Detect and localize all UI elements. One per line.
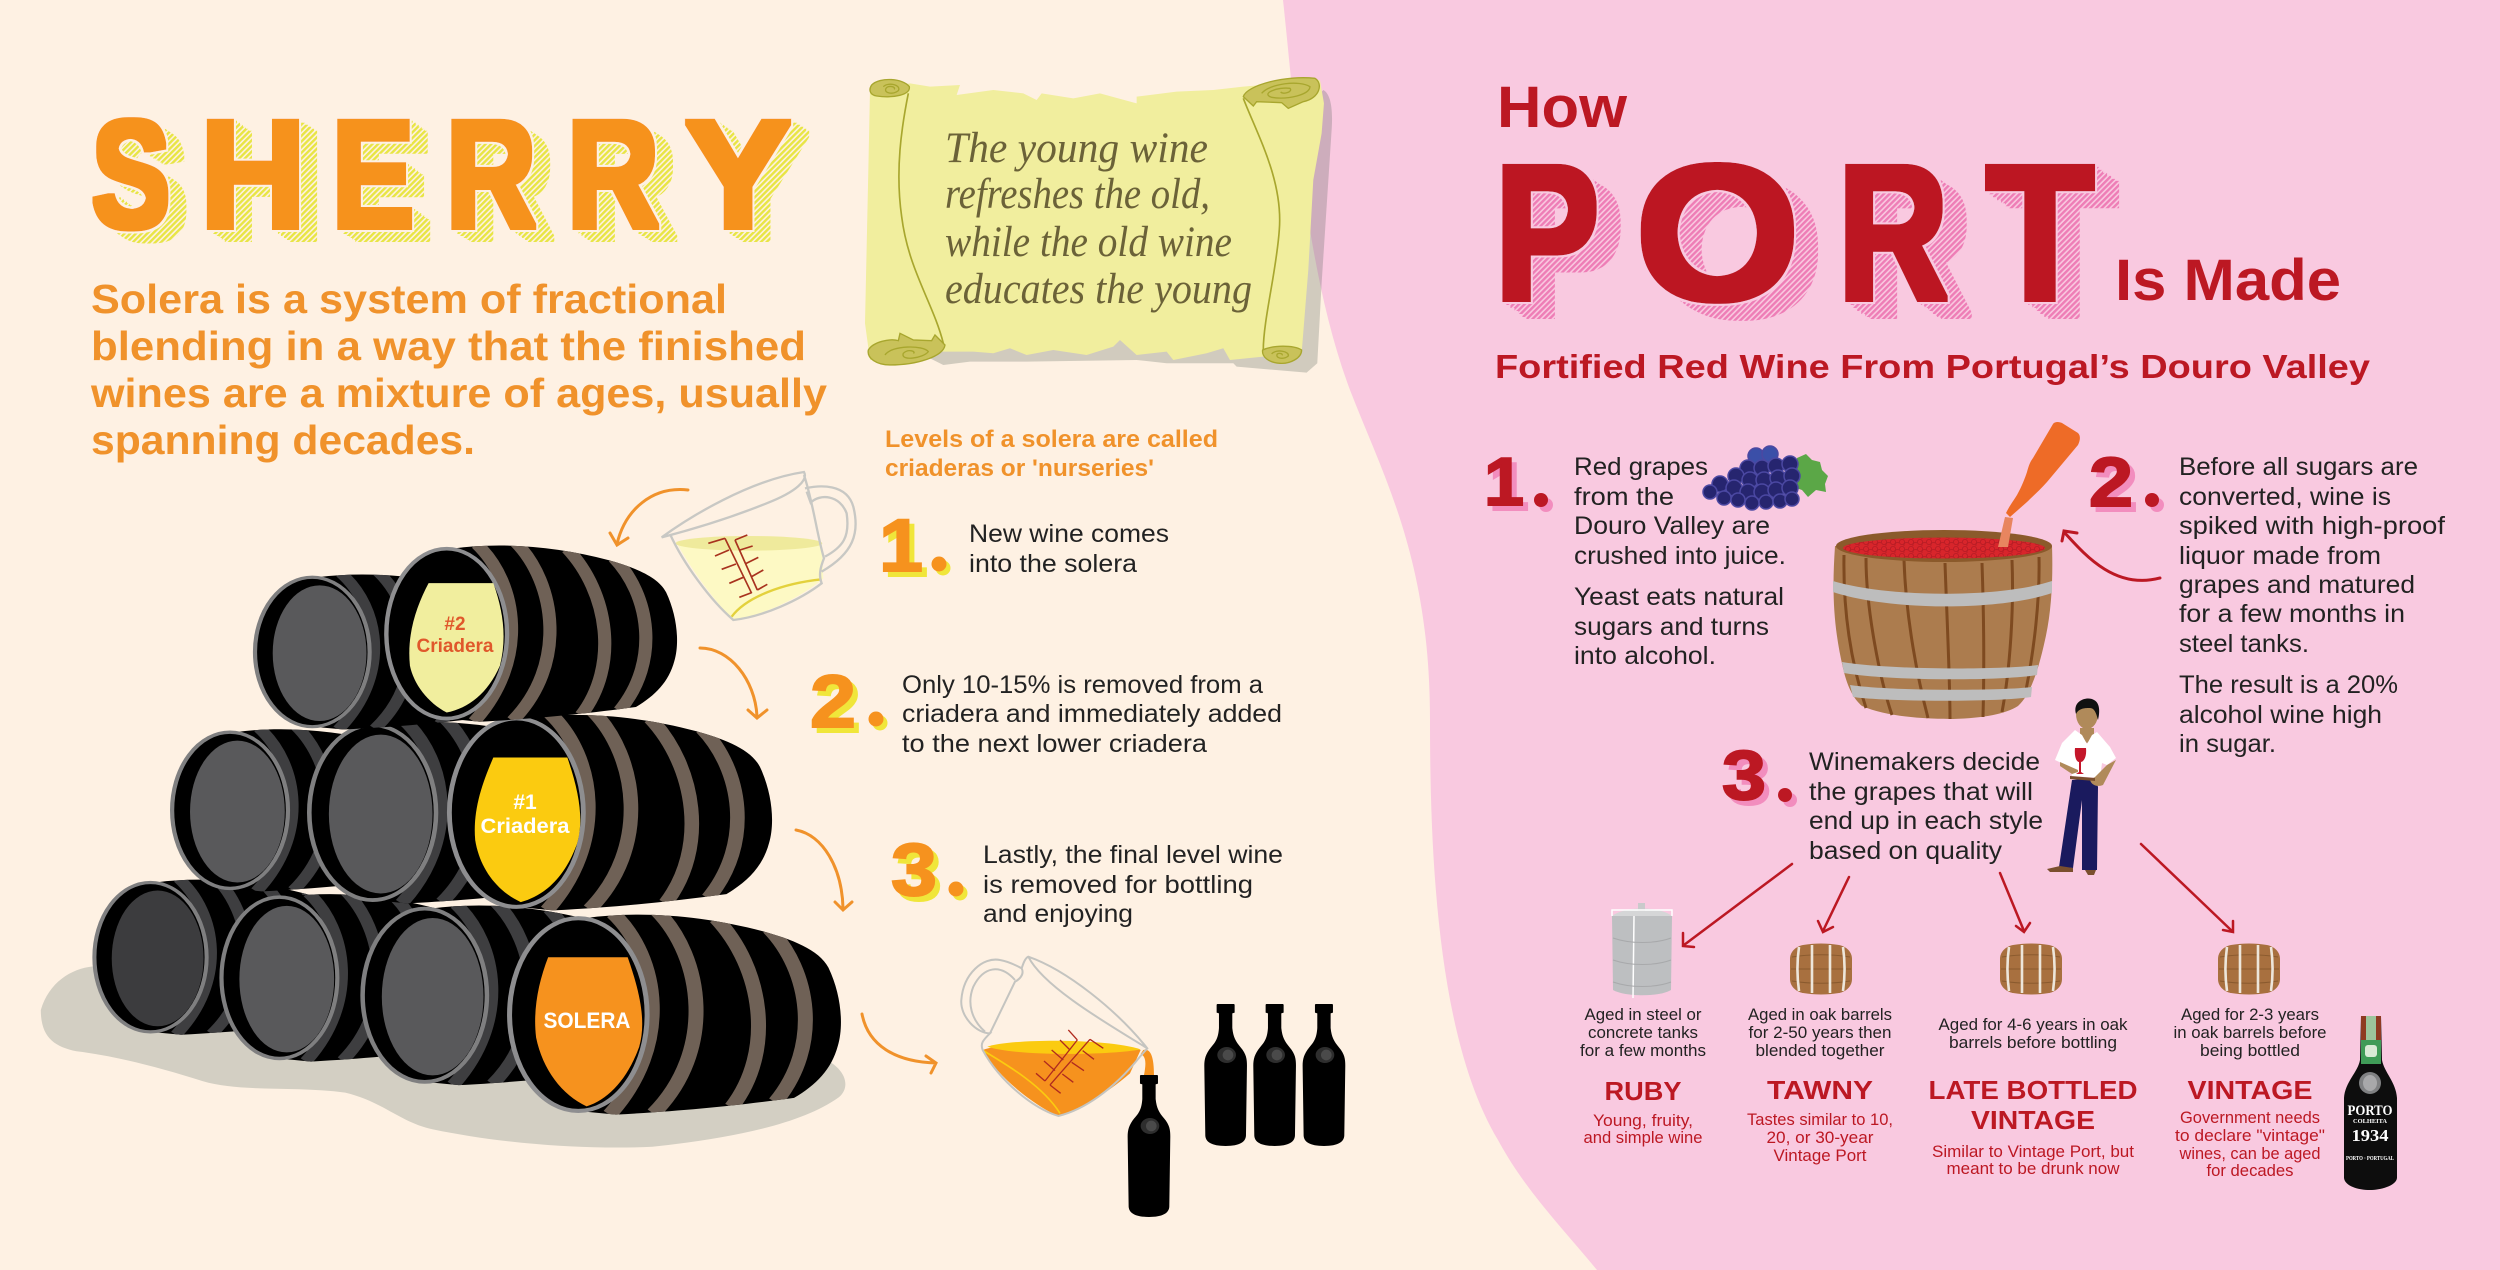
text: step 2 port — [2179, 453, 2445, 758]
arrow: spirit into vat — [2062, 531, 2160, 580]
quote text: refreshes the old, — [945, 171, 1210, 218]
barrel label: #1 criadera — [480, 791, 570, 838]
arrows: port styles — [1683, 844, 2233, 947]
column: vintage: wines, can be aged — [2179, 1145, 2320, 1163]
icon: oak barrel late bottled — [2000, 944, 2062, 994]
column: tawny: Tastes similar to 10, — [1747, 1111, 1893, 1129]
icon: oak barrel tawny — [1790, 944, 1852, 994]
text: step 1 port: into alcohol. — [1574, 642, 1716, 670]
title: SHERRY: S — [92, 89, 170, 260]
word: PORT — [1495, 125, 2094, 340]
text block: solera definition: Solera is a system of fractional — [91, 276, 727, 322]
barrel: top back — [255, 571, 531, 730]
icon: porto bottle 1934: PORTO — [2348, 1103, 2392, 1119]
title: SHERRY: R — [567, 89, 659, 260]
barrel: middle centre — [309, 718, 615, 903]
barrel stack — [41, 542, 845, 1148]
number 3 port — [1722, 736, 1797, 819]
text: step 2 port: converted, wine is — [2179, 483, 2391, 511]
text: step 2 port: steel tanks. — [2179, 630, 2309, 658]
text block: solera definition: wines are a mixture of ages, usually — [90, 370, 827, 416]
text: step 2 port: grapes and matured — [2179, 571, 2415, 599]
text: step 2 sherry: criadera and immediately added — [902, 700, 1282, 728]
text: step 1 port — [1574, 453, 1786, 670]
text: step 2 port: in sugar. — [2179, 730, 2276, 758]
column: vintage: being bottled — [2200, 1042, 2300, 1060]
column: late bottled vintage: LATE BOTTLED — [1928, 1075, 2138, 1105]
text: step 1 port: sugars and turns — [1574, 613, 1769, 641]
text: step 1 port: from the — [1574, 483, 1674, 511]
text: step 1 sherry: into the solera — [969, 550, 1137, 578]
column: ruby: RUBY — [1604, 1076, 1682, 1106]
column: ruby: Aged in steel or — [1584, 1006, 1702, 1024]
barrel label: #2 criadera: #2 — [444, 614, 466, 635]
icon: porto bottle 1934 — [2344, 1016, 2397, 1190]
number 3 port: 3 — [1727, 741, 1771, 819]
barrel: middle left — [172, 726, 451, 891]
number 2 port: 2 — [2089, 443, 2133, 521]
word: PORT: O — [1635, 125, 1800, 340]
title: SHERRY: H — [200, 89, 306, 260]
column: ruby — [1580, 1006, 1706, 1147]
text: step 3 port: end up in each style — [1809, 807, 2043, 835]
column: late bottled vintage: meant to be drunk now — [1946, 1160, 2120, 1178]
barrel: solera — [510, 910, 841, 1115]
text: step 2 port: spiked with high-proof — [2179, 512, 2445, 540]
number 2 port — [2089, 443, 2164, 526]
number 1 sherry: 1 — [879, 504, 923, 587]
text: step 1 port: Yeast eats natural — [1574, 583, 1784, 611]
text: step 3 port: based on quality — [1809, 837, 2003, 865]
text: step 3 port: the grapes that will — [1809, 778, 2033, 806]
text: step 1 port: Red grapes — [1574, 453, 1708, 481]
number 2 sherry: 2 — [815, 665, 861, 748]
column: vintage: for decades — [2206, 1162, 2294, 1180]
number 2 sherry: 2 — [810, 660, 856, 743]
column: vintage: Aged for 2-3 years — [2181, 1006, 2319, 1024]
text block: solera definition — [90, 276, 827, 463]
column: tawny: Vintage Port — [1774, 1147, 1867, 1165]
text: step 1 port: crushed into juice. — [1574, 542, 1786, 570]
text: step 3 sherry — [983, 841, 1283, 928]
text: step 2 port: The result is a 20% — [2179, 671, 2398, 699]
arrows: sherry flow — [610, 490, 936, 1073]
quote text: while the old wine — [945, 219, 1232, 266]
number 2 port: 2 — [2094, 448, 2138, 526]
column: late bottled vintage: VINTAGE — [1971, 1105, 2095, 1135]
icon: oak barrel vintage — [2218, 944, 2280, 994]
text block: solera definition: spanning decades. — [91, 417, 475, 463]
column: ruby: and simple wine — [1584, 1129, 1702, 1147]
title: How PORT Is Made — [1501, 86, 2339, 321]
icon: porto bottle 1934: COLHEITA — [2353, 1119, 2388, 1125]
text: step 1 sherry — [969, 520, 1169, 578]
title: SHERRY: R — [446, 89, 536, 260]
word: How: How — [1497, 75, 1628, 140]
column: vintage: Government needs — [2180, 1109, 2320, 1127]
number 1 port — [1484, 444, 1553, 525]
barrel: bottom centre — [221, 891, 501, 1062]
barrel label: #2 criadera: Criadera — [416, 636, 494, 657]
number 3 port: 3 — [1722, 736, 1766, 814]
quote text: The young wine — [945, 125, 1208, 172]
scroll with quote — [865, 78, 1332, 373]
heading: levels of a solera: criaderas or 'nurseries' — [885, 455, 1154, 482]
quote text — [945, 125, 1252, 313]
panel: port background — [1283, 0, 2500, 1270]
column: tawny: blended together — [1756, 1042, 1885, 1060]
quote text: educates the young — [945, 266, 1252, 313]
barrel label: #2 criadera — [416, 614, 494, 657]
barrel: bottom right grey — [363, 902, 662, 1085]
icon: grapes — [1703, 446, 1828, 510]
barrel: criadera 1 — [449, 711, 772, 910]
column: vintage: to declare "vintage" — [2175, 1127, 2325, 1145]
column: late bottled vintage: Aged for 4-6 years in oak — [1938, 1016, 2128, 1034]
text: step 1 sherry: New wine comes — [969, 520, 1169, 548]
ground shadow — [41, 966, 845, 1148]
column: vintage — [2174, 1006, 2326, 1180]
barrel label: #1 criadera: #1 — [513, 791, 537, 814]
icon: porto bottle 1934: PORTO · PORTUGAL — [2346, 1156, 2394, 1162]
column: tawny — [1747, 1006, 1893, 1165]
barrel label: solera: SOLERA — [544, 1008, 631, 1033]
text: step 2 sherry: Only 10-15% is removed from a — [902, 671, 1263, 699]
number 3 sherry — [891, 828, 968, 916]
icon: pouring jug and bottles — [961, 957, 1345, 1217]
column: tawny: Aged in oak barrels — [1748, 1006, 1892, 1024]
word: Is Made: Is Made — [2115, 248, 2341, 313]
icon: winemaker — [2047, 699, 2116, 875]
text block: solera definition: blending in a way that the finished — [91, 323, 806, 369]
column: late bottled vintage: Similar to Vintage Port, but — [1932, 1143, 2134, 1161]
column: tawny: for 2-50 years then — [1748, 1024, 1892, 1042]
number 1 port: 1 — [1489, 449, 1529, 525]
column: tawny: 20, or 30-year — [1766, 1129, 1874, 1147]
text: step 3 sherry: Lastly, the final level wine — [983, 841, 1283, 869]
text: step 3 sherry: and enjoying — [983, 900, 1133, 928]
text: step 3 port — [1809, 748, 2043, 865]
column: ruby: concrete tanks — [1588, 1024, 1698, 1042]
text: step 2 port: liquor made from — [2179, 542, 2381, 570]
barrel label: #1 criadera: Criadera — [480, 815, 570, 838]
number 1 port: 1 — [1484, 444, 1524, 520]
title: SHERRY: Y — [685, 89, 791, 260]
barrel: bottom left — [94, 876, 365, 1035]
column: late bottled vintage — [1928, 1016, 2138, 1178]
icon: orange bottle pouring — [1998, 422, 2080, 547]
word: PORT: P — [1495, 125, 1599, 340]
text: step 2 sherry: to the next lower criadera — [902, 730, 1207, 758]
column: vintage: VINTAGE — [2188, 1075, 2312, 1105]
number 3 sherry: 3 — [891, 828, 937, 911]
text: step 2 port: Before all sugars are — [2179, 453, 2418, 481]
icon: wooden vat — [1833, 530, 2052, 719]
number 1 sherry — [879, 504, 950, 592]
subtitle: Fortified Red Wine From Portugal’s Douro Valley — [1495, 348, 2371, 385]
icon: porto bottle 1934: 1934 — [2352, 1126, 2389, 1145]
column: tawny: TAWNY — [1767, 1075, 1873, 1105]
icon: measuring jug new wine — [662, 472, 856, 620]
text: step 2 port: for a few months in — [2179, 600, 2405, 628]
text: step 2 sherry — [902, 671, 1282, 758]
column: ruby: Young, fruity, — [1593, 1112, 1693, 1130]
title: SHERRY — [92, 117, 810, 244]
column: vintage: in oak barrels before — [2174, 1024, 2326, 1042]
barrel: criadera 2 — [386, 542, 677, 722]
text: step 3 sherry: is removed for bottling — [983, 871, 1253, 899]
text: step 2 port: alcohol wine high — [2179, 701, 2382, 729]
text: step 3 port: Winemakers decide — [1809, 748, 2040, 776]
number 1 sherry: 1 — [884, 509, 928, 592]
column: ruby: for a few months — [1580, 1042, 1706, 1060]
icon: steel tank — [1612, 903, 1672, 998]
column: late bottled vintage: barrels before bottling — [1949, 1034, 2117, 1052]
number 3 sherry: 3 — [896, 833, 942, 916]
title: SHERRY: E — [332, 89, 414, 260]
word: PORT: T — [1986, 125, 2094, 340]
text: step 1 port: Douro Valley are — [1574, 512, 1770, 540]
heading: levels of a solera — [885, 426, 1218, 482]
word: PORT: R — [1838, 125, 1948, 340]
heading: levels of a solera: Levels of a solera are called — [885, 426, 1218, 453]
number 2 sherry — [810, 660, 888, 748]
